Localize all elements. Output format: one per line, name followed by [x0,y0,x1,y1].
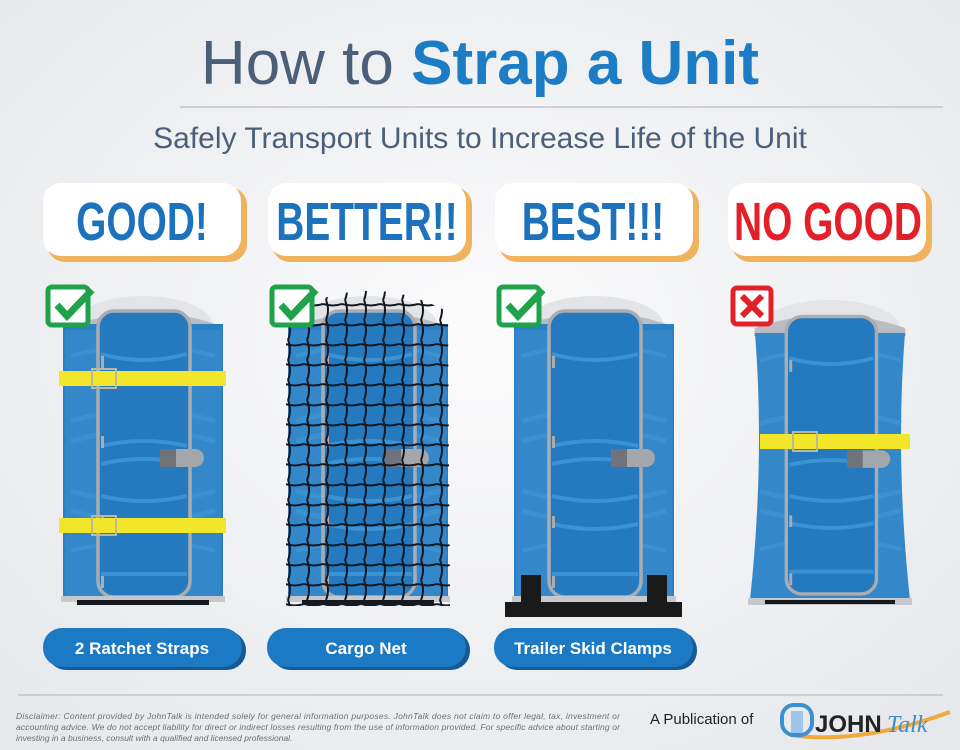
icon: check 3 [499,287,543,325]
logo: JOHNTalk: Talk [887,712,928,738]
header: BEST [495,183,699,262]
logo: JOHNTalk [782,705,950,738]
unit 1: ratchet straps [59,296,226,605]
unit 4: deformed unit [748,300,912,605]
disclaimer: accounting advice. We do not accept liability for direct or indirect losses resulting from the use of information provided. For specific advice about starting or [16,722,621,732]
unit 2: cargo net [286,291,450,606]
subtitle: Safely Transport Units to Increase Life of the Unit [153,122,807,155]
logo: JOHNTalk: JOHN [815,711,882,738]
strap bottom [59,516,226,535]
pill: 2 Ratchet Straps [43,628,246,670]
pill: Trailer Skid Clamps [494,628,697,670]
icon: check 2 [272,287,316,325]
header: NO GOOD: NO GOOD [734,191,922,251]
skid clamps [505,575,682,617]
strap top [59,369,226,388]
pill: 2 Ratchet Straps: 2 Ratchet Straps [75,639,209,658]
disclaimer: Disclaimer: Content provided by JohnTalk is intended solely for general information purposes. JohnTalk does not claim to offer legal, tax, investment or [16,711,621,721]
header: GOOD: GOOD! [76,191,208,251]
icon: x [733,288,771,324]
header: BETTER [268,183,472,262]
publication credit: A Publication of [650,711,754,728]
strap [760,432,910,451]
title: How to Strap a Unit [201,29,759,98]
icon: check 1 [48,287,92,325]
cargo net [286,291,450,606]
unit 3: skid clamps [505,296,682,617]
header: BEST: BEST!!! [522,191,664,251]
disclaimer: investing in a business, consult with a qualified and licensed professional. [16,733,292,743]
header: GOOD [43,183,247,262]
pill: Trailer Skid Clamps: Trailer Skid Clamps [514,639,672,658]
pill: Cargo Net: Cargo Net [325,639,407,658]
pill: Cargo Net [267,628,470,670]
header: BETTER: BETTER!! [276,191,458,251]
